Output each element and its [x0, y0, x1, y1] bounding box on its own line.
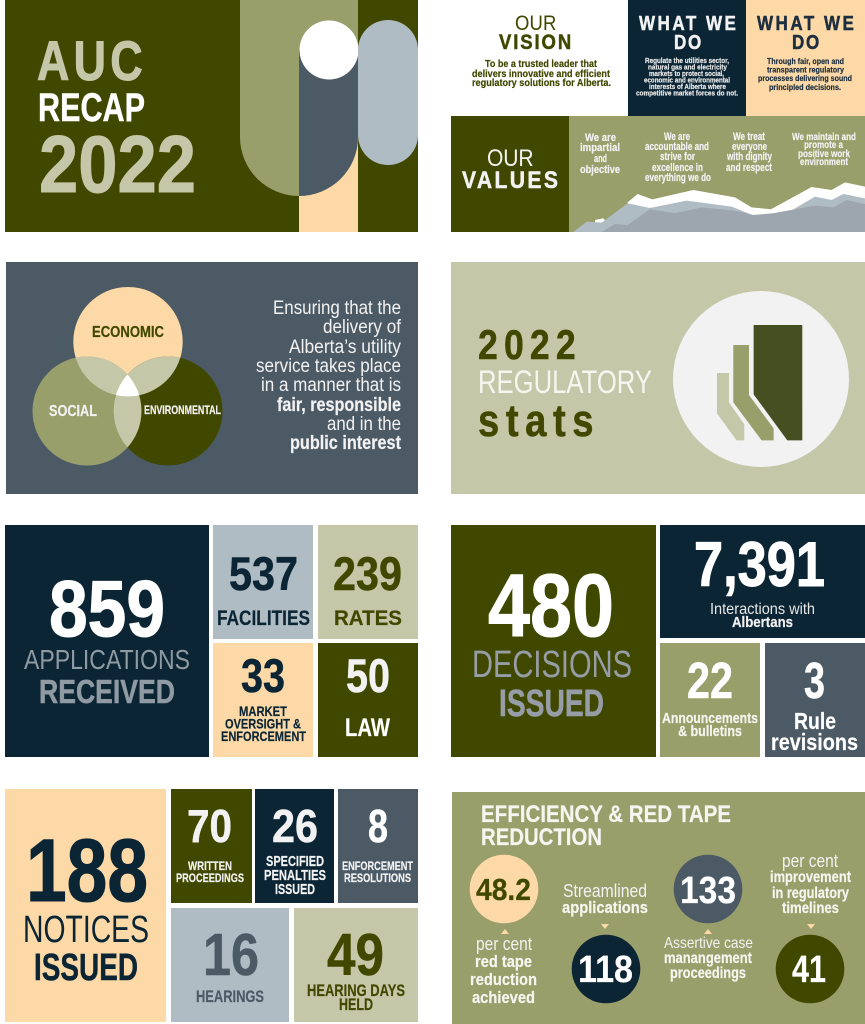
- stat card: 239 rates: RATES: [334, 607, 402, 630]
- stat card: 16 hearings: 16: [203, 922, 259, 988]
- text: value four: positive work: [798, 148, 850, 160]
- text: vision statement: [472, 58, 611, 89]
- heading: our vision: [499, 12, 571, 54]
- text: what we do description: economic and environmental: [644, 76, 730, 84]
- text: value three: everyone: [732, 141, 767, 153]
- text: what we do description: interests of Alberta where: [649, 82, 726, 91]
- text: value three: We treat: [733, 131, 765, 143]
- stat: 118 streamlined applications: 118: [578, 949, 633, 991]
- stat: 859 applications: APPLICATIONS: [24, 644, 190, 675]
- stat card: 33 market oversight and enforcement: 33: [241, 649, 285, 702]
- stat card: 70 written proceedings: WRITTEN: [188, 859, 232, 873]
- text: value four: environment: [800, 156, 848, 168]
- text: mandate statement: Ensuring that the: [273, 298, 401, 319]
- graphic: abstract geometric shapes: [240, 0, 418, 232]
- heading: what we do: WHAT WE: [639, 12, 736, 34]
- chart: venn diagram: SOCIAL: [49, 403, 97, 420]
- stat card: 7,391 interactions: [660, 525, 865, 638]
- text: value two: strive for: [660, 151, 696, 163]
- heading: our values: [462, 145, 558, 193]
- heading: what we do: DO: [792, 31, 819, 53]
- stat: 859 applications: RECEIVED: [39, 673, 175, 710]
- stat card: 7,391 interactions: Albertans: [732, 614, 793, 631]
- stat card: 8 enforcement resolutions: RESOLUTIONS: [344, 871, 411, 885]
- text: mandate statement: delivery of: [323, 317, 402, 338]
- stat card: 49 hearing days held: HEARING DAYS: [307, 981, 405, 1000]
- chart: venn diagram: ENVIRONMENTAL: [144, 405, 221, 417]
- stat card: 33 market oversight and enforcement: MARKET: [239, 703, 287, 719]
- stat card: 22 announcements: 22: [687, 652, 733, 709]
- chart: venn diagram: ECONOMIC: [92, 324, 164, 341]
- text: value one: and: [594, 153, 607, 165]
- text: how we do it description: [758, 56, 852, 92]
- stat: 118 streamlined applications: applications: [562, 898, 648, 917]
- text: value three: [726, 131, 773, 174]
- panel: 2022 regulatory stats: [451, 262, 865, 494]
- stat: 133 assertive case management proceedings: [664, 855, 753, 982]
- heading: what we do: [639, 12, 736, 53]
- panel: our vision: [472, 12, 611, 89]
- text: mandate statement: service takes place: [256, 356, 401, 377]
- icon: Alberta map shapes: [673, 291, 849, 467]
- heading: our vision: VISION: [499, 31, 571, 54]
- stat card: 3 rule revisions: Rule: [794, 708, 836, 734]
- stat: 133 assertive case management proceedings: proceedings: [670, 965, 746, 982]
- text: what we do description: markets to protect social,: [649, 69, 724, 78]
- title: [37, 29, 196, 210]
- heading: our values: VALUES: [462, 167, 558, 193]
- stat card: 239 rates: [318, 525, 418, 639]
- stat: 41 per cent improvement in regulatory timelines: improvement: [770, 869, 851, 886]
- heading: what we do: [757, 12, 854, 53]
- panel: sustainability venn diagram: [6, 262, 418, 494]
- stat: 188 notices: NOTICES: [23, 909, 149, 951]
- stat card: 50 law: [318, 643, 418, 757]
- heading: 2022 regulatory stats: stats: [478, 395, 594, 446]
- stat: 41 per cent improvement in regulatory timelines: [770, 851, 851, 1003]
- panel: efficiency and red tape reduction: [452, 792, 865, 1024]
- title: RECAP: [38, 86, 145, 130]
- stat: 188 notices: ISSUED: [34, 947, 138, 989]
- title: 2022: [39, 120, 196, 210]
- text: mandate statement: public interest: [290, 433, 402, 454]
- stat card: 239 rates: 239: [333, 547, 402, 600]
- panel: what we do, navy: [628, 0, 746, 116]
- stat card: 70 written proceedings: 70: [187, 800, 232, 852]
- stat: 133 assertive case management proceedings: Assertive case: [664, 935, 753, 952]
- stat card: 537 facilities: 537: [229, 547, 298, 600]
- stat card: 537 facilities: FACILITIES: [217, 607, 310, 630]
- text: what we do description: [636, 56, 738, 98]
- text: mandate statement: and in the: [327, 414, 401, 435]
- stat card: 3 rule revisions: 3: [804, 652, 825, 709]
- text: value two: accountable and: [645, 141, 709, 153]
- text: value one: objective: [580, 164, 620, 176]
- text: vision statement: To be a trusted leader that: [485, 58, 597, 70]
- panel: AUC Recap 2022 cover: [5, 0, 418, 232]
- stat: 41 per cent improvement in regulatory timelines: per cent: [782, 851, 838, 871]
- heading: 2022 regulatory stats: [478, 322, 652, 446]
- panel: applications received: [5, 525, 209, 757]
- text: vision statement: regulatory solutions for Alberta.: [472, 77, 611, 89]
- stat card: 7,391 interactions: Interactions with: [710, 601, 815, 618]
- panel: decisions issued: [451, 525, 656, 757]
- stat card: 26 specified penalties: ISSUED: [275, 882, 315, 898]
- stat: 48.2 per cent red tape reduction: red tape: [475, 952, 532, 971]
- stat card: 50 law: LAW: [345, 714, 390, 742]
- title: AUC: [37, 29, 143, 92]
- stat: 133 assertive case management proceedings: 133: [680, 870, 736, 912]
- stat: 133 assertive case management proceedings: manangement: [664, 950, 752, 967]
- heading: what we do: DO: [674, 31, 701, 53]
- stat card: 33 market oversight and enforcement: ENFORCEMENT: [221, 728, 306, 744]
- stat: 41 per cent improvement in regulatory timelines: timelines: [782, 900, 839, 917]
- text: value three: with dignity: [726, 151, 773, 163]
- heading: 2022 regulatory stats: REGULATORY: [478, 364, 652, 400]
- stat: 480 decisions: [472, 555, 632, 725]
- stat card: 22 announcements: & bulletins: [678, 723, 742, 740]
- stat card: 49 hearing days held: 49: [327, 922, 384, 988]
- text: how we do it description: Through fair, open and: [767, 56, 844, 66]
- panel: our values: [451, 116, 865, 232]
- text: how we do it description: principled decisions.: [769, 82, 841, 92]
- stat card: 49 hearing days held: HELD: [339, 995, 373, 1014]
- text: value four: promote a: [804, 139, 843, 151]
- heading: efficiency and red tape reduction: EFFICIENCY & RED TAPE: [481, 801, 731, 828]
- text: mandate statement: fair, responsible: [277, 395, 401, 416]
- stat card: 70 written proceedings: [171, 789, 252, 903]
- stat: 48.2 per cent red tape reduction: [470, 855, 538, 1007]
- text: what we do description: competitive market forces do not.: [636, 88, 738, 98]
- heading: our vision: OUR: [515, 12, 556, 35]
- stat: 188 notices: 188: [26, 820, 148, 920]
- stat card: 22 announcements: Announcements: [662, 710, 758, 727]
- graphic: mountain range: [573, 182, 865, 232]
- stat: 41 per cent improvement in regulatory timelines: 41: [792, 949, 826, 991]
- text: what we do description: Regulate the utilities sector,: [645, 56, 729, 65]
- stat: 859 applications: 859: [49, 564, 165, 653]
- stat: 118 streamlined applications: [562, 881, 648, 1003]
- stat card: 26 specified penalties: PENALTIES: [264, 868, 326, 884]
- stat card: 26 specified penalties: 26: [272, 800, 318, 852]
- stat card: 16 hearings: [171, 908, 289, 1022]
- text: value four: [792, 131, 856, 168]
- text: mandate statement: Alberta’s utility: [289, 337, 401, 358]
- panel: what we do, peach: [746, 0, 865, 116]
- stat: 480 decisions: 480: [488, 555, 614, 655]
- text: value two: everything we do: [645, 172, 711, 184]
- text: value two: excellence in: [652, 162, 703, 174]
- stat card: 537 facilities: [213, 525, 313, 639]
- chart: venn diagram: [32, 287, 222, 466]
- heading: our values: OUR: [487, 145, 534, 171]
- text: what we do description: natural gas and electricity: [648, 62, 728, 72]
- stat: 118 streamlined applications: Streamlined: [563, 881, 647, 901]
- heading: efficiency and red tape reduction: REDUCTION: [481, 824, 602, 851]
- stat card: 33 market oversight and enforcement: OVERSIGHT &: [225, 716, 301, 732]
- panel: notices issued: [5, 789, 166, 1022]
- stat card: 49 hearing days held: [294, 908, 418, 1022]
- stat card: 70 written proceedings: PROCEEDINGS: [176, 871, 244, 885]
- text: mandate statement: [256, 298, 402, 454]
- stat card: 16 hearings: HEARINGS: [196, 987, 264, 1006]
- stat card: 26 specified penalties: SPECIFIED: [266, 854, 324, 870]
- stat card: 26 specified penalties: [255, 789, 334, 903]
- stat: 48.2 per cent red tape reduction: 48.2: [476, 872, 531, 907]
- heading: efficiency and red tape reduction: [481, 801, 731, 851]
- stat card: 22 announcements: [660, 643, 760, 757]
- stat card: 8 enforcement resolutions: [338, 789, 418, 903]
- stat: 188 notices: [23, 820, 149, 989]
- stat card: 8 enforcement resolutions: ENFORCEMENT: [342, 859, 414, 873]
- text: vision statement: delivers innovative and efficient: [472, 68, 610, 80]
- stat card: 50 law: 50: [346, 649, 390, 702]
- text: mandate statement: in a manner that is: [261, 375, 401, 396]
- stat: 48.2 per cent red tape reduction: achieved: [472, 988, 535, 1007]
- text: value three: and respect: [726, 162, 772, 174]
- stat: 859 applications: [24, 564, 190, 710]
- stat card: 8 enforcement resolutions: 8: [368, 800, 388, 852]
- stat card: 7,391 interactions: 7,391: [694, 530, 825, 600]
- stat: 41 per cent improvement in regulatory timelines: in regulatory: [772, 885, 849, 902]
- text: value one: [580, 132, 620, 176]
- text: value two: We are: [664, 131, 690, 143]
- stat card: 33 market oversight and enforcement: [213, 643, 313, 757]
- heading: what we do: WHAT WE: [757, 12, 854, 34]
- stat: 48.2 per cent red tape reduction: per cent: [476, 934, 532, 954]
- stat: 480 decisions: DECISIONS: [472, 644, 632, 686]
- text: value two: [645, 131, 711, 184]
- heading: 2022 regulatory stats: 2022: [478, 322, 576, 369]
- text: how we do it description: transparent regulatory: [767, 64, 844, 74]
- stat: 48.2 per cent red tape reduction: reduction: [470, 970, 537, 989]
- text: value one: impartial: [580, 142, 620, 154]
- text: value one: We are: [585, 132, 616, 144]
- stat: 480 decisions: ISSUED: [499, 683, 604, 725]
- stat card: 3 rule revisions: [765, 643, 865, 757]
